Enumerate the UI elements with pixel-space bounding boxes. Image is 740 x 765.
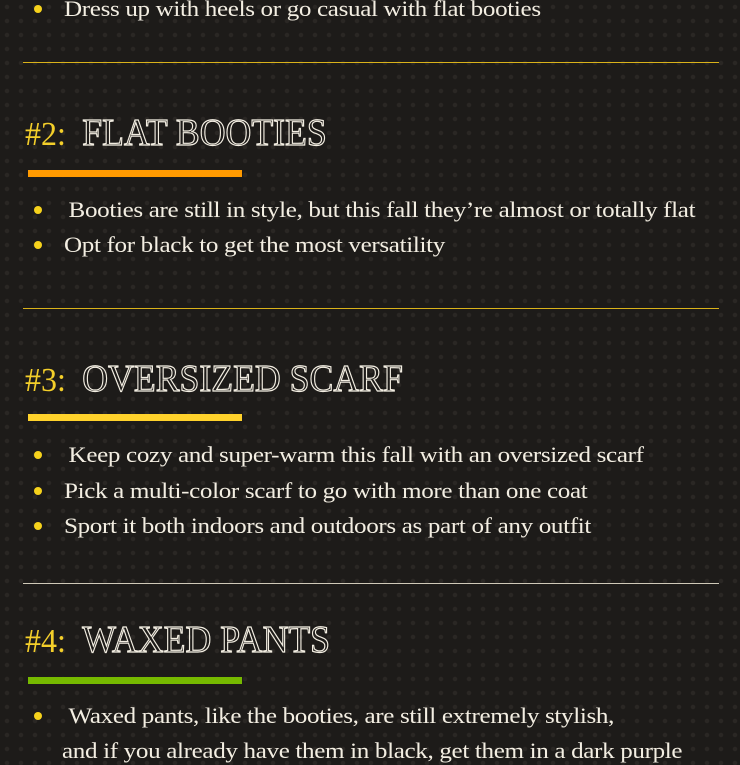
- bullet 1: Waxed pants, like the booties, are still extremely stylish,: [69, 703, 614, 728]
- bar: orange: [28, 170, 242, 177]
- bullets: waxed pants: [34, 703, 682, 763]
- continuation: and if you already have them in black, get them in a dark purple: [62, 738, 682, 763]
- bullet 2: Opt for black to get the most versatility: [64, 232, 445, 257]
- heading: oversized scarf: #3: OVERSIZED SCARF: [25, 358, 403, 400]
- bar: yellow: [28, 414, 242, 421]
- bullet 2: Pick a multi-color scarf to go with more than one coat: [64, 478, 587, 503]
- bar: green: [28, 677, 242, 684]
- bullet 1: Booties are still in style, but this fall they’re almost or totally flat: [69, 197, 695, 222]
- bullet 1: Keep cozy and super-warm this fall with an oversized scarf: [69, 442, 644, 467]
- bullet 3: Sport it both indoors and outdoors as part of any outfit: [64, 513, 591, 538]
- heading: flat booties: #2: FLAT BOOTIES: [25, 112, 327, 154]
- bullets: flat booties: [34, 197, 696, 257]
- bullets: scarf: [34, 442, 644, 538]
- heading: waxed pants: #4: WAXED PANTS: [25, 619, 330, 661]
